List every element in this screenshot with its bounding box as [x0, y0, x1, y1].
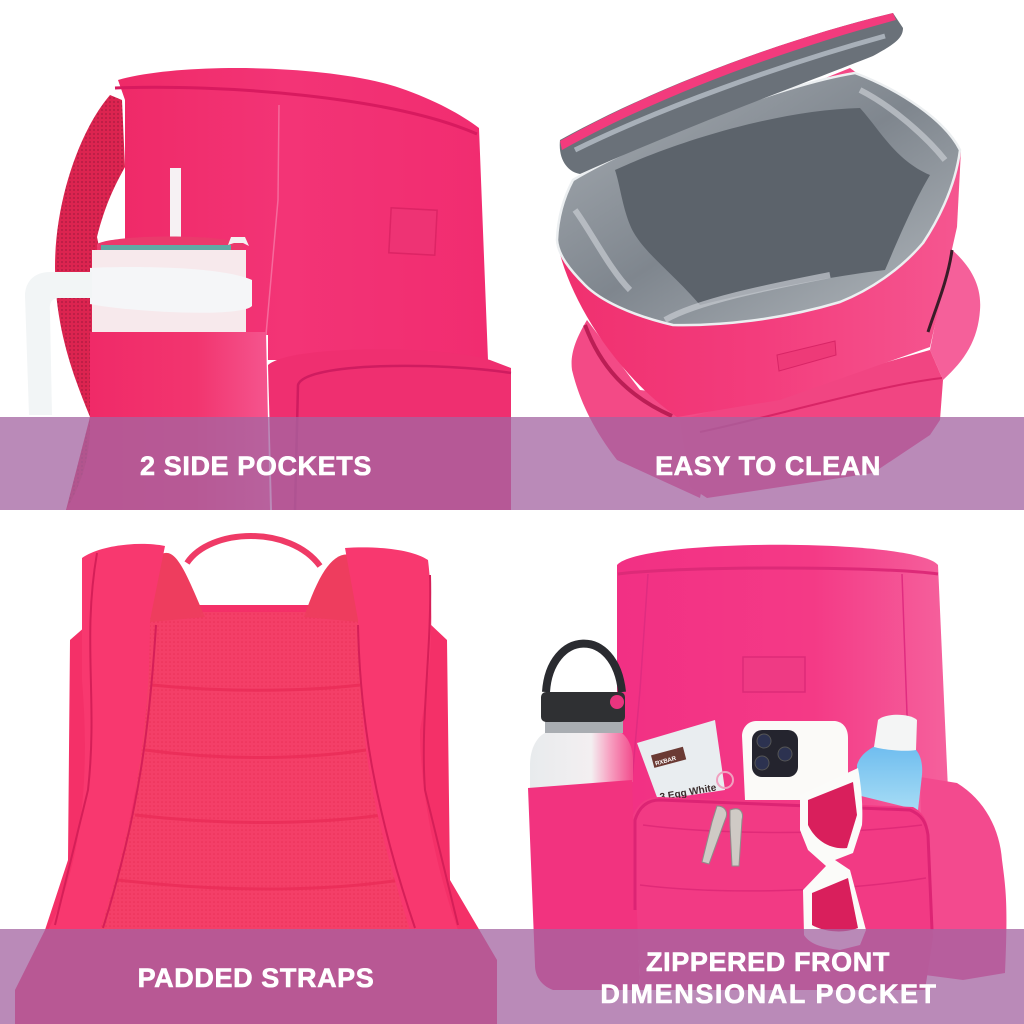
icon: protein bar: [637, 720, 725, 803]
caption band: easy to clean: EASY TO CLEAN: [655, 451, 881, 481]
front pocket: [268, 349, 511, 510]
body seam: [266, 105, 279, 335]
pocket zipper: [700, 378, 942, 432]
left strap: [48, 544, 165, 930]
icon: phone: [742, 721, 848, 800]
right side pocket: [920, 777, 1006, 980]
caption band: 2 side pockets: [0, 417, 512, 510]
icon: protein bar: RXBAR: [655, 756, 678, 767]
caption band: padded straps: PADDED STRAPS: [138, 963, 374, 993]
mesh ribs: [118, 685, 400, 889]
mesh back strap: [55, 95, 125, 510]
right elastic pocket: [930, 248, 980, 380]
panel: padded straps: [15, 536, 497, 1024]
icon: tumbler: [25, 168, 252, 415]
right strap: [345, 547, 458, 930]
lid: [560, 13, 903, 174]
logo strip: [777, 341, 836, 371]
logo patch: [743, 657, 805, 692]
caption band: zippered front dimensional pocket: [512, 929, 1024, 1024]
pocket zipper: [635, 800, 932, 930]
bag body: [557, 68, 961, 417]
right mesh shoulder: [304, 554, 360, 622]
top zipper band: [618, 568, 938, 574]
caption band: zippered front dimensional pocket: DIMENSIONAL POCKET: [600, 979, 938, 1009]
elastic shadow left: [585, 325, 672, 416]
backpack body: [15, 605, 497, 1024]
highlight folds: [575, 90, 945, 320]
caption band: zippered front dimensional pocket: ZIPPERED FRONT: [646, 947, 890, 977]
lining dark floor: [615, 108, 930, 305]
left side pocket: [528, 780, 640, 990]
side seams: [632, 574, 909, 780]
left mesh shoulder: [150, 553, 205, 622]
icon: sunscreen: [857, 715, 922, 810]
panel: 2 side pockets: [25, 68, 511, 510]
side pocket: [66, 332, 270, 510]
body lower pocket: [680, 350, 943, 498]
left elastic pocket: [572, 320, 720, 498]
logo patch: [389, 208, 437, 255]
top zipper: [115, 87, 477, 134]
strap piping: [55, 553, 458, 928]
panel: easy to clean: [557, 13, 980, 498]
icon: sunglasses: [800, 768, 866, 950]
icon: water bottle: [530, 644, 633, 790]
icon: keys: [702, 772, 742, 866]
lining: [557, 73, 960, 325]
main body: [617, 545, 948, 960]
front pocket: [633, 797, 933, 990]
panel: zippered front pocket: [528, 545, 1006, 990]
pocket ribs: [640, 825, 926, 891]
elastic shadow right: [928, 250, 952, 332]
caption band: easy to clean: [512, 417, 1024, 510]
icon: protein bar: 3 Egg White: [659, 782, 718, 803]
backpack body: [118, 68, 488, 360]
caption band: padded straps: [0, 929, 512, 1024]
top handle: [187, 536, 320, 566]
mesh back panel: [100, 612, 412, 930]
caption band: 2 side pockets: 2 SIDE POCKETS: [140, 451, 372, 481]
